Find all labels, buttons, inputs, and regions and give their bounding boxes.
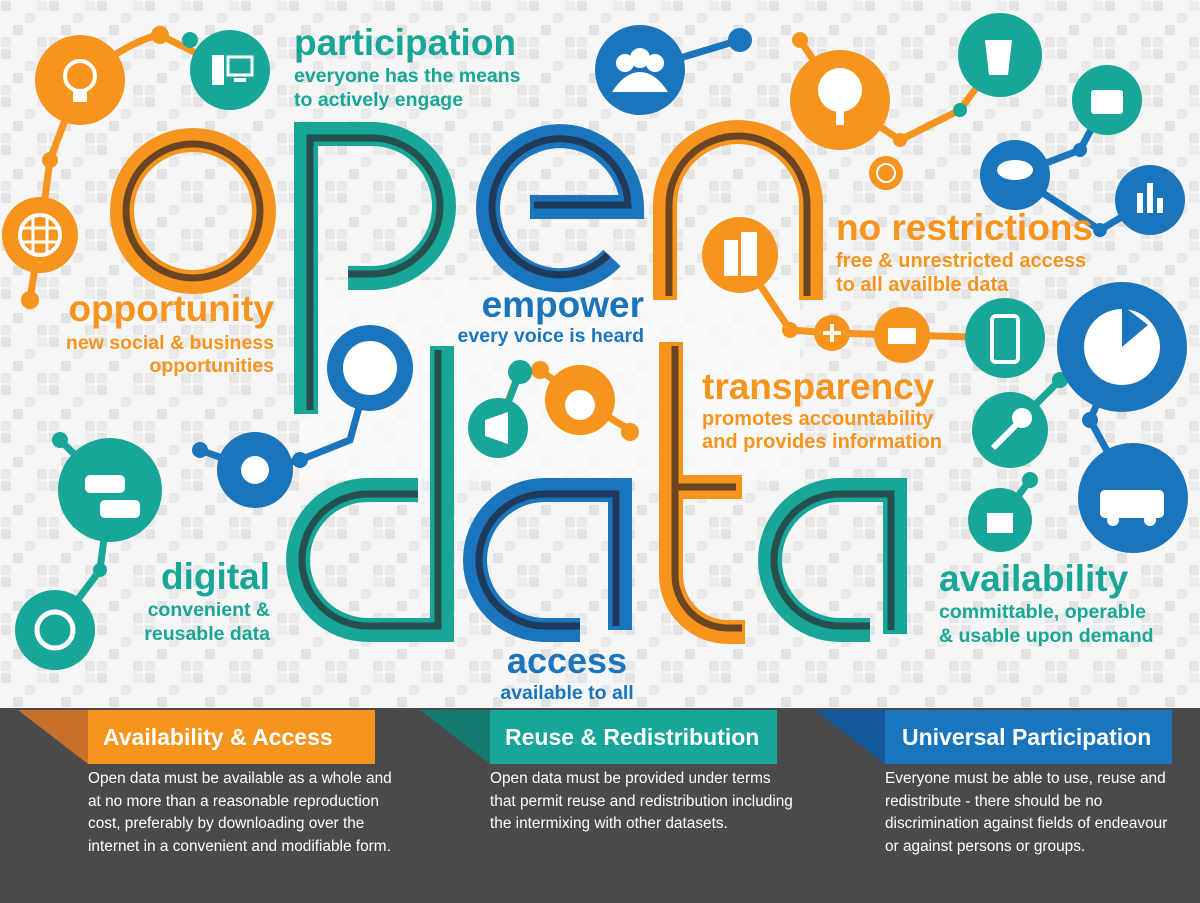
icon: plus (814, 315, 850, 351)
tab: Reuse & Redistribution (420, 710, 777, 764)
icon: people (595, 25, 685, 115)
tab: Availability & Access (18, 710, 375, 764)
text: digital (144, 556, 270, 645)
icon: grid globe (2, 197, 78, 273)
icon: earth (327, 325, 413, 411)
icon: factory (874, 307, 930, 363)
text: empower (458, 284, 644, 347)
letter o (122, 140, 264, 282)
icon: cloud (980, 140, 1050, 210)
icon: pie chart (1057, 282, 1187, 412)
text: availability: & usable upon demand (939, 625, 1154, 647)
text: reuse body: Open data must be provided under terms (490, 770, 771, 787)
text: reuse body (490, 770, 793, 832)
text: availability body: cost, preferably by downloading over the (88, 815, 364, 832)
text: no restrictions: no restrictions (836, 207, 1093, 248)
text: no restrictions: to all availble data (836, 274, 1008, 296)
text: transparency: transparency (702, 366, 934, 407)
letter t (671, 342, 745, 632)
text: no restrictions (836, 207, 1093, 296)
tab: Reuse & Redistribution: Reuse & Redistribution (505, 724, 759, 750)
text: digital: reusable data (144, 623, 270, 645)
text: access: access (507, 640, 627, 681)
icon: key (972, 392, 1048, 468)
text: availability: availability (939, 558, 1128, 599)
text: empower: every voice is heard (458, 325, 644, 347)
text: digital: convenient & (148, 599, 270, 621)
icon: phone (965, 298, 1045, 378)
text: opportunity (66, 288, 274, 377)
icon: clock (869, 156, 903, 190)
icon: megaphone (468, 398, 528, 458)
icon: refresh (15, 590, 95, 670)
icon: money bag (545, 365, 615, 435)
letter d (298, 346, 442, 630)
icon: cars (58, 438, 162, 542)
icon: tree (790, 50, 890, 150)
text: availability (939, 558, 1154, 647)
text: transparency: and provides information (702, 431, 942, 453)
text: transparency: promotes accountability (702, 408, 933, 430)
text: opportunity: opportunities (149, 355, 274, 377)
text: availability body: internet in a convenient and modifiable form. (88, 838, 391, 854)
text: opportunity: new social & business (66, 332, 274, 354)
icon: cow (958, 13, 1042, 97)
text: transparency (702, 366, 942, 453)
text: reuse body: that permit reuse and redistribution including (490, 792, 793, 810)
text: availability body: Open data must be available as a whole and (88, 770, 392, 787)
text: participation body: or against persons or groups. (885, 838, 1085, 854)
connectors (30, 35, 1150, 630)
letter a blue (475, 490, 620, 630)
icon: lock (968, 488, 1032, 552)
icon: lightbulb (35, 35, 125, 125)
text: participation body: Everyone must be able to use, reuse and (885, 770, 1166, 787)
text: participation (294, 22, 521, 111)
text: opportunity: opportunity (68, 288, 274, 329)
text: digital: digital (161, 556, 270, 597)
icon: briefcase (1072, 65, 1142, 135)
text: availability: committable, operable (939, 601, 1146, 623)
text: participation: everyone has the means (294, 65, 521, 87)
icon: bar chart (1115, 165, 1185, 235)
text: availability body (88, 770, 392, 854)
text: participation body (885, 770, 1168, 854)
tab: Universal Participation: Universal Participation (902, 724, 1151, 750)
icon: buildings (702, 217, 778, 293)
text: empower: empower (482, 284, 644, 325)
text: participation body: discrimination against fields of endeavour (885, 815, 1167, 832)
tab: Universal Participation (815, 710, 1172, 764)
text: participation body: redistribute - there should be no (885, 792, 1102, 810)
icon: sun (217, 432, 293, 508)
text: access (500, 640, 634, 704)
text: reuse body: the intermixing with other datasets. (490, 815, 728, 832)
bottom panel (0, 708, 1200, 903)
tab: Availability & Access: Availability & Access (103, 724, 333, 750)
icon: bus (1078, 443, 1188, 553)
text: access: available to all (500, 682, 634, 704)
letter e (488, 136, 632, 280)
text: no restrictions: free & unrestricted access (836, 250, 1086, 272)
letter a teal (770, 490, 895, 634)
letter n (665, 132, 811, 300)
text: availability body: at no more than a reasonable reproduction (88, 792, 379, 810)
letter p (306, 134, 444, 414)
icon: computer (190, 30, 270, 110)
text: participation: participation (294, 22, 516, 63)
text: participation: to actively engage (294, 89, 463, 111)
